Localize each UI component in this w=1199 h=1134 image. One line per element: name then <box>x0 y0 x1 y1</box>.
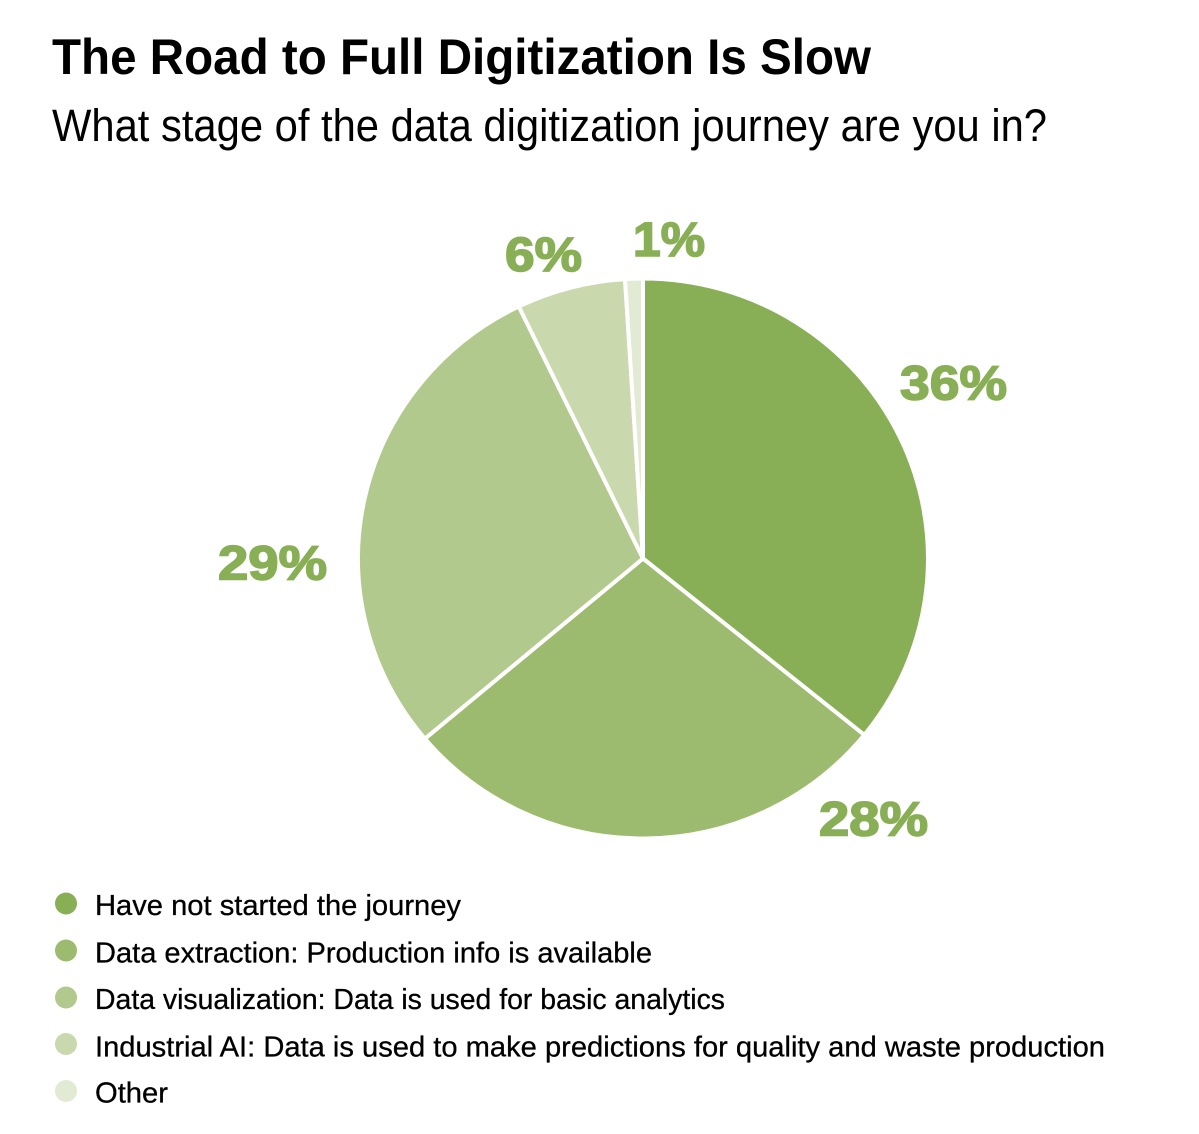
slice: other 1% <box>625 278 643 558</box>
legend dot: data extraction <box>55 940 77 962</box>
legend dot: data visualization <box>55 986 77 1008</box>
legend text: have not started: Have not started the journey <box>95 890 462 922</box>
legend text: other: Other <box>95 1078 168 1110</box>
slice: data extraction 28% <box>425 558 864 838</box>
legend text: data extraction: Data extraction: Production info is available <box>95 938 652 970</box>
slice: industrial AI 6% <box>519 279 643 558</box>
label 36%: 36% <box>900 358 1007 410</box>
slice: data visualization 29% <box>358 306 643 739</box>
pie chart <box>358 278 928 838</box>
title: The Road to Full Digitization Is Slow <box>52 29 871 85</box>
legend dot: other <box>55 1080 77 1102</box>
legend dot: have not started <box>55 892 77 914</box>
legend text: data visualization: Data visualization: Data is used for basic analytics <box>95 984 725 1016</box>
legend dot: industrial AI <box>55 1033 77 1055</box>
slice: have not started 36% <box>643 278 928 735</box>
label 29%: 29% <box>218 538 327 590</box>
subtitle: What stage of the data digitization journey are you in? <box>52 100 1047 151</box>
legend <box>55 890 1105 1110</box>
label 6%: 6% <box>505 229 582 282</box>
label 28%: 28% <box>819 794 928 846</box>
legend text: industrial AI: Industrial AI: Data is used to make predictions for quality and waste production <box>95 1032 1105 1064</box>
label 1%: 1% <box>633 214 705 267</box>
